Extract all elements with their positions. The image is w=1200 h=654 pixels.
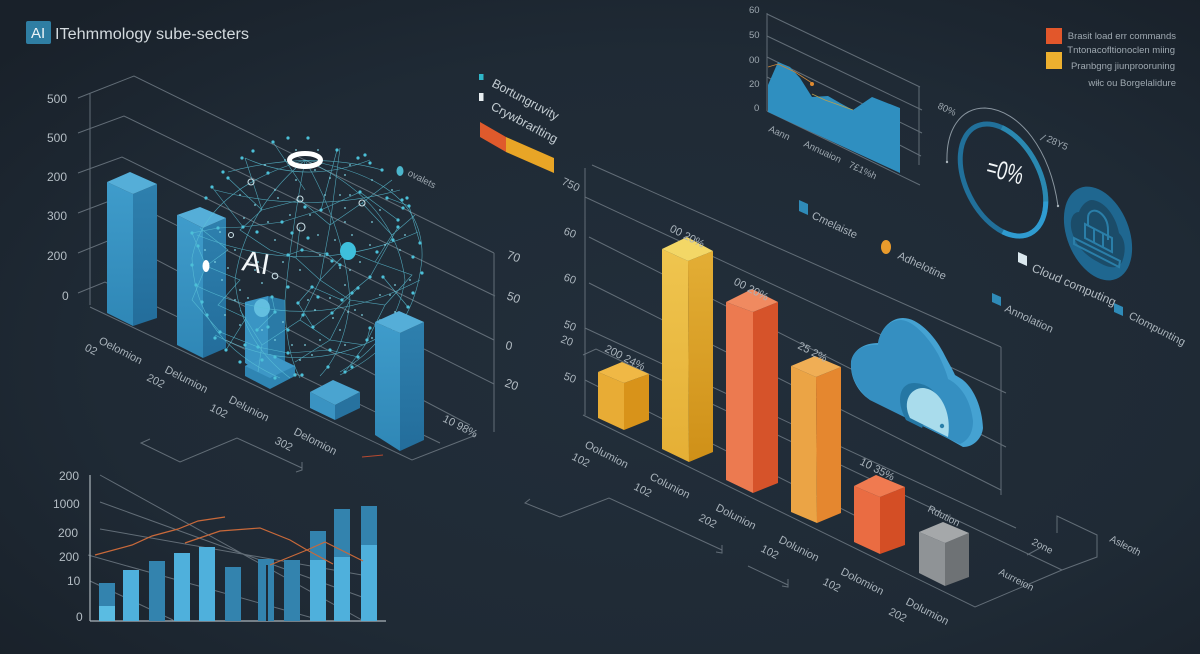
cloud illustration: [851, 318, 983, 447]
y axis labels: 500: [47, 92, 67, 106]
right chart x axis labels: 102: [759, 543, 780, 562]
value labels: Aurreion: [997, 567, 1035, 594]
x axis labels: 302: [273, 435, 294, 454]
donut gauge: 80%: [936, 101, 958, 119]
legend item: clompunting: Clompunting: [1127, 310, 1187, 349]
chart y axis labels: 00: [749, 55, 760, 66]
bar 4 short box: [310, 380, 360, 420]
chart x axis labels: Aann: [767, 124, 791, 143]
AI network sphere: [192, 138, 422, 378]
right chart x axis labels: Dolunion: [714, 502, 758, 532]
combo chart y labels: 10: [67, 574, 81, 588]
bar 3: [245, 296, 295, 389]
right chart x axis labels: 102: [632, 481, 653, 500]
bar: orange: [791, 356, 841, 523]
top area chart: [749, 5, 922, 185]
bar: red-orange: [726, 289, 778, 493]
right chart x axis labels: 102: [821, 576, 842, 595]
right chart x axis labels: Oolumion: [583, 439, 630, 471]
value labels: 10 35%: [858, 456, 897, 484]
top right legend: Tntonacofltionoclen miing: [1067, 45, 1175, 56]
legend: bottom group with swatch: Bortungruvity: [490, 76, 562, 124]
right chart x axis labels: Colunion: [648, 471, 692, 501]
cloud lock icon: [1051, 176, 1145, 291]
red mark: [362, 455, 383, 457]
top right legend: Brasit load err commands: [1068, 31, 1176, 42]
right chart y axis labels: 750: [560, 176, 581, 194]
bar: grey: [919, 522, 969, 586]
bottom left combo chart: [53, 469, 386, 624]
chart y axis labels: 50: [749, 30, 760, 41]
right chart x axis labels: 202: [697, 512, 718, 531]
x axis labels: Delomion: [292, 426, 338, 458]
right axis labels: 0: [504, 338, 514, 353]
x axis labels: Delumion: [163, 364, 209, 396]
title with AI badge: [26, 21, 249, 44]
combo chart y labels: 200: [58, 526, 78, 540]
top right legend: wiłc ou Borgelalidure: [1087, 78, 1176, 89]
sphere glowing nodes: [202, 179, 365, 279]
value labels: Asleoth: [1108, 534, 1142, 559]
chart x axis labels: Annuaion: [802, 139, 843, 166]
x axis labels: 02: [83, 342, 99, 358]
gauge ring: [943, 110, 1063, 250]
title with AI badge: ITehmmology sube-secters: [55, 26, 249, 43]
value labels: [603, 223, 1142, 594]
donut gauge: =0%: [983, 152, 1027, 190]
blue area: [768, 62, 900, 173]
right chart x axis labels: 202: [887, 606, 908, 625]
y axis labels: [47, 92, 69, 303]
right chart x axis labels: 102: [570, 451, 591, 470]
value labels: 00 20%: [732, 276, 771, 304]
legend: bottom group with swatch: [479, 74, 562, 173]
x axis labels: Delunion: [227, 394, 271, 424]
x axis labels: 202: [145, 372, 166, 391]
sphere label: ovalets: [406, 168, 438, 191]
title with AI badge: AI: [31, 25, 45, 42]
right chart y axis labels: [559, 176, 581, 386]
bar: red short: [854, 475, 905, 554]
bar: yellow short: [598, 362, 649, 430]
bar 1: [107, 172, 157, 326]
value labels: Rdution: [926, 504, 961, 529]
chart y axis labels: 0: [754, 103, 759, 114]
value labels: 2one: [1030, 537, 1055, 557]
right axis labels: [441, 248, 523, 441]
chart x axis labels: [767, 124, 878, 182]
right axis labels: 70: [505, 248, 523, 265]
left isometric bar chart with AI sphere: [47, 76, 523, 472]
right chart x axis labels: [570, 439, 950, 628]
right axis labels: 20: [503, 376, 521, 393]
right chart y axis labels: 60: [562, 272, 578, 287]
top right legend: Pranbgng jiunprooruning: [1071, 61, 1175, 72]
x axis labels: 102: [208, 402, 229, 421]
y axis labels: 200: [47, 249, 67, 263]
legend item: annolation: Annolation: [1003, 303, 1055, 336]
sphere pole ring: [290, 154, 320, 166]
donut gauge: [936, 101, 1069, 250]
top right legend: [1046, 28, 1176, 89]
legend item: cloud computing: Cloud computing: [1030, 261, 1118, 309]
chart x axis labels: 7£1%h: [847, 160, 878, 182]
x axis labels: [83, 335, 338, 458]
bar: yellow tall: [662, 237, 713, 462]
combo chart y labels: 200: [59, 469, 79, 483]
legend item: cremate: Cmelaiste: [810, 210, 859, 241]
y axis labels: 0: [62, 289, 69, 303]
orange trend lines: [95, 517, 363, 565]
combo chart y labels: 1000: [53, 497, 80, 511]
legend item: adhelotine: [881, 240, 948, 283]
right isometric bar chart: [525, 165, 1142, 628]
bracket arrows: [525, 498, 788, 587]
middle legend items: [799, 200, 1187, 349]
x axis labels: Oelomion: [97, 335, 144, 367]
donut gauge: 28Y5: [1045, 134, 1069, 153]
chart y axis labels: 20: [749, 79, 760, 90]
bracket arrow: [141, 438, 302, 472]
chart y axis labels: [749, 5, 760, 114]
y axis labels: 300: [47, 209, 67, 223]
right chart x axis labels: Dolomion: [839, 566, 885, 598]
right axis labels: 10 98%: [441, 413, 480, 441]
bar 5: [375, 311, 424, 451]
legend item: cremate: [799, 200, 859, 241]
value labels: 25 2%: [796, 340, 829, 365]
right chart y axis labels: 50: [562, 319, 578, 334]
combo chart y labels: 200: [59, 550, 79, 564]
right chart x axis labels: Dolunion: [777, 534, 821, 564]
right chart y axis labels: 60: [562, 226, 578, 241]
bar 2: [177, 207, 226, 358]
chart y axis labels: 60: [749, 5, 760, 16]
bars: [99, 506, 377, 621]
right chart x axis labels: Dolumion: [904, 596, 950, 628]
right chart y axis labels: 50: [562, 371, 578, 386]
combo chart y labels: 0: [76, 610, 83, 624]
AI label: AI: [240, 245, 272, 282]
legend: bottom group with swatch: Crywbrarlting: [489, 99, 560, 146]
y axis labels: 500: [47, 131, 67, 145]
legend item: adhelotine: Adhelotine: [896, 250, 948, 283]
value labels: 200 24%: [603, 343, 647, 373]
value labels: 00 20%: [668, 223, 707, 251]
combo chart y labels: [53, 469, 83, 624]
right chart y axis labels: 20: [559, 334, 575, 349]
right axis labels: 50: [505, 289, 523, 306]
y axis labels: 200: [47, 170, 67, 184]
legend item: annolation: [992, 293, 1055, 336]
